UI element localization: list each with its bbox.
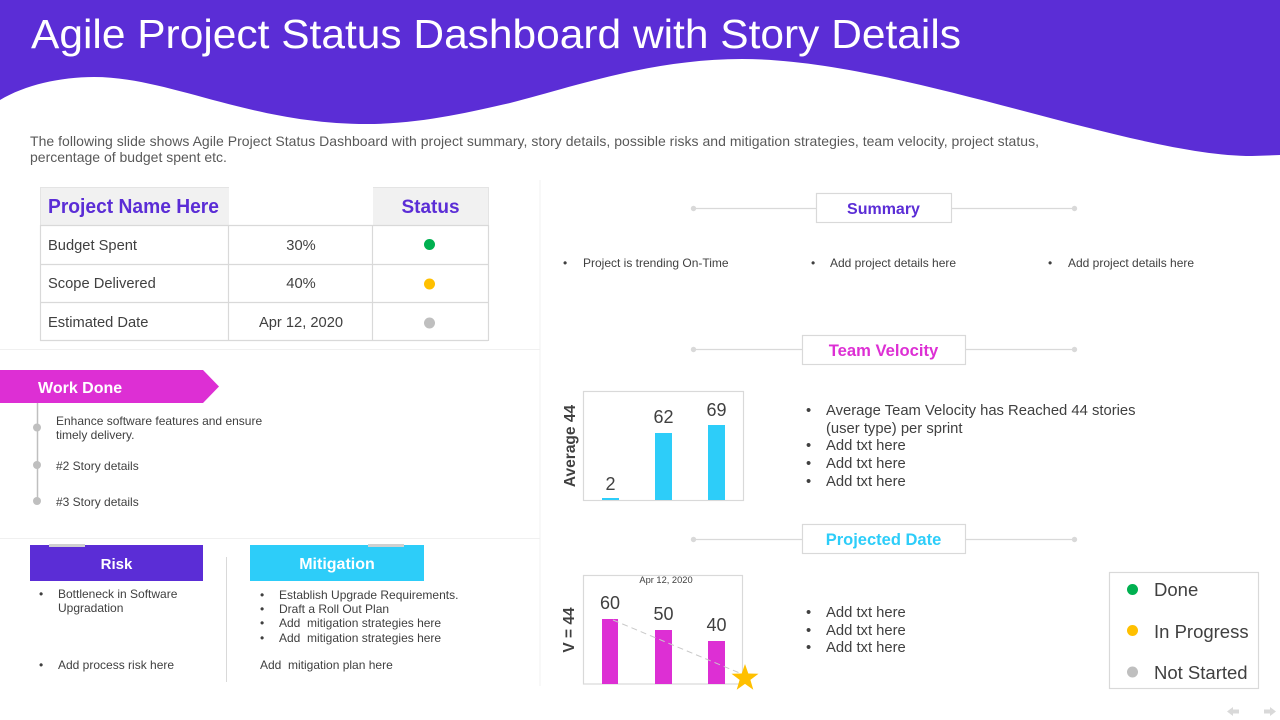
work done items: timely delivery. <box>56 428 134 442</box>
table heading: project name: Project Name Here <box>48 196 219 218</box>
icon: star <box>732 664 758 690</box>
description <box>30 133 1039 165</box>
work done arrow heading <box>0 370 219 403</box>
velocity bar chart: 69 <box>706 400 727 420</box>
velocity notes: Add txt here <box>826 438 906 454</box>
title: Agile Project Status Dashboard with Story Details <box>31 11 961 57</box>
row: estimated date <box>48 315 435 331</box>
projected bar chart: Apr 12, 2020 <box>639 575 693 585</box>
velocity notes: • <box>806 403 811 419</box>
mitigation items: Add mitigation strategies here <box>279 616 441 630</box>
mitigation items: • <box>260 616 264 630</box>
summary items: • <box>563 256 567 270</box>
mitigation heading <box>250 544 424 581</box>
projected bar chart: 50 <box>653 604 674 624</box>
projected date heading: Projected Date <box>826 531 941 549</box>
summary items: • <box>1048 256 1052 270</box>
projected notes <box>806 605 906 656</box>
mitigation items: • <box>260 588 264 602</box>
risk panel <box>30 544 203 672</box>
velocity notes: Add txt here <box>826 474 906 490</box>
description: percentage of budget spent etc. <box>30 149 227 165</box>
projected notes: Add txt here <box>826 640 906 656</box>
row: scope delivered: 40% <box>286 276 316 292</box>
table heading: status: Status <box>401 197 460 218</box>
icon: previous arrow <box>1227 707 1239 716</box>
summary items: Add project details here <box>1068 256 1194 270</box>
risk heading <box>30 544 203 581</box>
risk items <box>39 587 178 672</box>
risk items: • <box>39 587 43 601</box>
row: estimated date: Estimated Date <box>48 315 148 331</box>
team velocity heading: Team Velocity <box>829 341 939 360</box>
projected notes: • <box>806 640 811 656</box>
projected axis label: V = 44 <box>561 607 578 653</box>
risk items: • <box>39 658 43 672</box>
projected bar chart: 60 <box>600 593 620 613</box>
legend: Done <box>1154 579 1198 600</box>
mitigation heading: Mitigation <box>299 556 375 573</box>
risk heading: Risk <box>101 556 133 573</box>
velocity notes: Add txt here <box>826 456 906 472</box>
summary items <box>563 256 1194 270</box>
description: The following slide shows Agile Project Status Dashboard with project summary, story details, possible risks and mitigation strategies, team velocity, project status, <box>30 133 1039 149</box>
velocity notes: • <box>806 456 811 472</box>
summary items: Project is trending On-Time <box>583 256 729 270</box>
velocity bar chart: 2 <box>605 474 616 494</box>
mitigation items <box>260 588 458 672</box>
work done timeline <box>33 403 41 505</box>
legend: In Progress <box>1154 621 1249 642</box>
projected notes: Add txt here <box>826 605 906 621</box>
projected notes: Add txt here <box>826 623 906 639</box>
icon: next arrow <box>1264 707 1276 716</box>
velocity notes <box>806 403 1136 490</box>
row: scope delivered: Scope Delivered <box>48 276 156 292</box>
risk items: Bottleneck in Software <box>58 587 178 601</box>
projected notes: • <box>806 623 811 639</box>
row: budget spent <box>48 238 435 254</box>
summary section <box>563 194 1194 270</box>
summary heading <box>691 194 1077 222</box>
risk items: Upgradation <box>58 601 123 615</box>
summary items: • <box>811 256 815 270</box>
velocity notes: (user type) per sprint <box>826 421 963 437</box>
risk items: Add process risk here <box>58 658 174 672</box>
work done panel <box>0 370 262 509</box>
mitigation panel <box>250 544 458 672</box>
velocity notes: Average Team Velocity has Reached 44 stories <box>826 403 1136 419</box>
summary items: Add project details here <box>830 256 956 270</box>
legend: Not Started <box>1154 662 1248 683</box>
team velocity section <box>562 336 1136 500</box>
mitigation items: • <box>260 631 264 645</box>
row: estimated date: Apr 12, 2020 <box>259 315 343 331</box>
header wave banner <box>0 0 1280 156</box>
work done arrow heading: Work Done <box>38 380 122 397</box>
row: budget spent: 30% <box>286 238 316 254</box>
mitigation items: Add mitigation strategies here <box>279 631 441 645</box>
project status table <box>40 187 488 341</box>
work done items: #2 Story details <box>56 459 139 473</box>
projected date section <box>561 524 1077 690</box>
projected notes: • <box>806 605 811 621</box>
projected bar chart: 40 <box>706 615 727 635</box>
work done items <box>56 414 262 509</box>
projected date heading <box>691 524 1077 554</box>
mitigation items: Establish Upgrade Requirements. <box>279 588 458 602</box>
velocity bar chart: 62 <box>653 407 674 427</box>
team velocity heading <box>691 336 1077 364</box>
mitigation items: • <box>260 602 264 616</box>
mitigation items: Draft a Roll Out Plan <box>279 602 389 616</box>
velocity notes: • <box>806 474 811 490</box>
velocity notes: • <box>806 438 811 454</box>
legend <box>1110 572 1258 688</box>
row: budget spent: Budget Spent <box>48 238 137 254</box>
row: scope delivered <box>48 276 435 292</box>
projected bar chart <box>584 575 758 690</box>
work done items: #3 Story details <box>56 495 139 509</box>
work done items: Enhance software features and ensure <box>56 414 262 428</box>
velocity bar chart <box>584 392 744 500</box>
summary heading: Summary <box>847 201 920 218</box>
velocity axis label: Average 44 <box>562 405 579 487</box>
mitigation items: Add mitigation plan here <box>260 658 393 672</box>
